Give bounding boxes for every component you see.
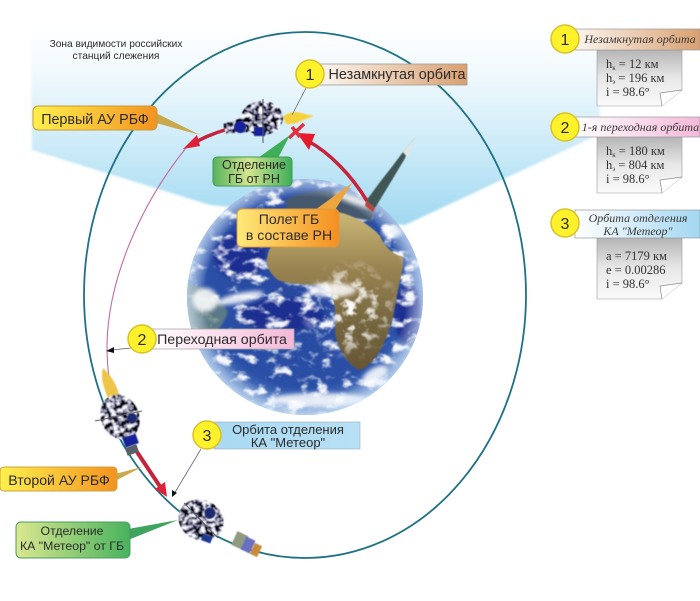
orbit label 3 [172,421,360,497]
heading 2 [551,113,700,141]
heading 3: Орбита отделения [589,211,688,225]
rocket [365,138,415,212]
spacecraft Meteor [231,531,262,557]
visibility zone [30,25,600,225]
arrow: second burn [137,452,167,497]
heading 1: Незамкнутая орбита [583,32,696,46]
parameter note 1 [597,50,682,106]
flame 2 [102,368,119,398]
callout: second burn [0,467,142,491]
panel: open orbit [551,25,700,106]
panel: Meteor separation orbit [551,209,700,299]
satellite 2: upper stage [93,388,147,456]
satellite 3: upper stage [172,492,230,548]
parameter note 2: к [612,151,616,159]
callout: stage separation [213,135,292,186]
separation marker [289,124,304,138]
parameter note 3: a = 7179 км [606,249,667,263]
label: visibility zone: станций слежения [73,51,159,62]
parameter note 3: i = 98.6° [606,277,650,291]
callout: Meteor separation: Отделение [41,524,104,538]
parameter note 2 [597,137,682,193]
parameter note 1: = 12 км [616,57,659,71]
globe [185,178,425,416]
label: visibility zone: Зона видимости российских [50,39,182,50]
clouds over Africa [300,260,396,360]
flame 1 [283,112,314,124]
parameter note 2: i = 98.6° [606,172,650,186]
parameter note 1: = 196 км [615,71,665,85]
heading 3 [551,209,700,238]
callout: Meteor separation: КА "Метеор" от ГБ [20,539,124,553]
parameter note 2: = 804 км [615,158,665,172]
large cloud bands [192,189,402,407]
orbit label 2 [106,325,294,353]
heading 1 [551,25,700,53]
orbit label 3: Орбита отделения [232,422,344,437]
parameter note 2: = 180 км [616,144,665,158]
satellite 1: upper stage [223,99,283,143]
heading 2: 2 [561,120,570,137]
continent: Africa [267,212,403,370]
parameter note 3 [597,238,682,299]
ocean deep patches [214,231,422,345]
panel: first transfer orbit [551,113,700,193]
callout: stage separation: ГБ от РН [228,172,280,186]
heading 1: 1 [561,32,570,49]
cloud texture over ocean [185,178,425,416]
transfer orbit line [107,148,186,385]
orbit label 3: КА "Метеор" [251,435,326,450]
callout: Meteor separation [16,520,178,558]
parameter note 2: h [606,158,612,172]
parameter note 1: э [612,78,615,86]
parameter note 1: i = 98.6° [606,85,650,99]
parameter note 1: к [612,64,616,72]
parameter note 1: h [606,57,612,71]
callout: stage separation: Отделение [222,158,286,172]
callout: first burn: Первый АУ РБФ [41,112,149,128]
arrow: launch flight [297,133,367,201]
orbit label 3: 3 [203,428,212,445]
heading 3: 3 [561,216,570,233]
callout: second burn: Второй АУ РБФ [8,472,110,488]
final orbit ellipse [84,32,526,558]
orbit label 1 [292,60,467,115]
callout: flight in launch vehicle [237,183,352,247]
parameter note 2: h [606,144,612,158]
parameter note 3: e = 0.00286 [606,263,665,277]
orbit label 2: Переходная орбита [157,332,287,348]
callout: flight in launch vehicle: в составе РН [246,227,332,243]
callout: flight in launch vehicle: Полет ГБ [259,211,319,227]
arrow: first burn [183,129,228,149]
orbit label 1: Незамкнутая орбита [329,67,465,83]
continent: Europe [285,191,375,222]
callout: first burn [33,106,200,135]
heading 3: КА "Метеор" [602,224,674,238]
continent: South America [188,284,228,329]
heading 2: 1-я переходная орбита [582,120,699,134]
label: visibility zone [50,39,182,62]
parameter note 1: h [606,71,612,85]
orbit label 1: 1 [306,67,315,84]
orbit label 2: 2 [138,332,147,349]
parameter note 2: э [612,165,615,173]
